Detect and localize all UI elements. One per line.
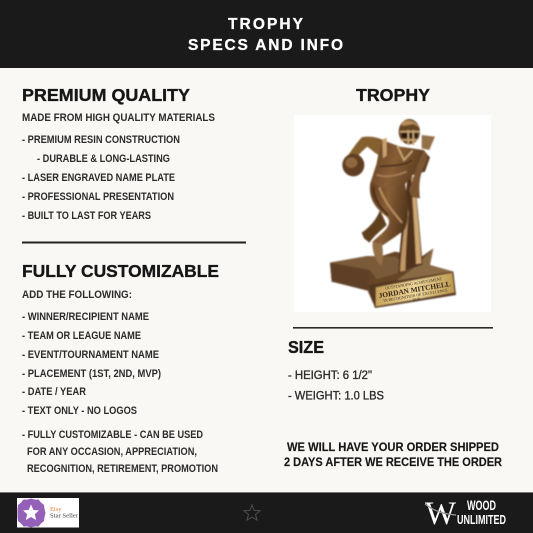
helmet [399, 119, 420, 144]
heading: premium quality: PREMIUM QUALITY [22, 85, 190, 105]
icon: center star [244, 505, 260, 520]
icon: etsy star seller badge: Star Seller [50, 512, 79, 520]
usage note [22, 429, 218, 475]
shoe [372, 242, 383, 266]
customization list: - WINNER/RECIPIENT NAME [22, 311, 149, 323]
feature list: materials: - PREMIUM RESIN CONSTRUCTION [22, 134, 180, 146]
back leg [362, 210, 387, 243]
engraved plate: JORDAN MITCHELL [378, 279, 451, 300]
feature list: materials: - LASER ENGRAVED NAME PLATE [22, 172, 175, 184]
panel: size [288, 337, 384, 402]
feature list: materials [22, 112, 215, 222]
shipping note: WE WILL HAVE YOUR ORDER SHIPPED [287, 440, 499, 454]
star column [398, 172, 423, 273]
usage note: - FULLY CUSTOMIZABLE - CAN BE USED [22, 429, 203, 441]
engraved plate: OUTSTANDING ACHIEVEMENT [385, 276, 443, 291]
header title: SPECS AND INFO [188, 37, 343, 54]
star wing tip [422, 135, 435, 150]
engraved plate [376, 273, 455, 308]
icon: etsy star seller badge [17, 498, 79, 528]
header band [0, 0, 533, 68]
customization list: - PLACEMENT (1ST, 2ND, MVP) [22, 368, 161, 380]
header title: TROPHY [228, 16, 304, 33]
icon: etsy star seller badge: Etsy [50, 506, 62, 513]
arm with football [348, 137, 382, 161]
logo: wood unlimited: UNLIMITED [457, 512, 506, 527]
footer band [0, 492, 533, 533]
heading: trophy: TROPHY [356, 85, 430, 105]
panel: fully customizable [22, 261, 219, 475]
customization list: ADD THE FOLLOWING: [22, 289, 132, 301]
customization list: - TEAM OR LEAGUE NAME [22, 330, 141, 342]
engraved plate: 2016 [412, 296, 421, 302]
logo: wood unlimited: W [425, 496, 457, 532]
feature list: materials: - BUILT TO LAST FOR YEARS [22, 210, 151, 222]
feature list: materials: - DURABLE & LONG-LASTING [37, 153, 170, 165]
customization list: - TEXT ONLY - NO LOGOS [22, 405, 137, 417]
size specs [288, 368, 384, 402]
torso [371, 139, 430, 188]
star base [330, 248, 453, 307]
usage note: FOR ANY OCCASION, APPRECIATION, [27, 446, 197, 458]
panel: premium quality [22, 85, 215, 222]
customization list [22, 289, 161, 417]
logo: wood unlimited: WOOD [467, 497, 496, 513]
size specs: - WEIGHT: 1.0 LBS [288, 388, 384, 402]
right arm [409, 150, 427, 198]
logo: wood unlimited [425, 496, 506, 532]
usage note: RECOGNITION, RETIREMENT, PROMOTION [27, 463, 218, 475]
heading: size: SIZE [288, 337, 324, 357]
front leg [370, 182, 408, 248]
product photo: football trophy [294, 115, 491, 312]
shipping note: 2 DAYS AFTER WE RECEIVE THE ORDER [284, 455, 502, 469]
customization list: - DATE / YEAR [22, 386, 86, 398]
feature list: materials: MADE FROM HIGH QUALITY MATERIALS [22, 112, 215, 124]
size specs: - HEIGHT: 6 1/2" [288, 368, 372, 382]
customization list: - EVENT/TOURNAMENT NAME [22, 349, 159, 361]
shipping note [284, 440, 502, 469]
header title [188, 16, 343, 54]
heading: fully customizable: FULLY CUSTOMIZABLE [22, 261, 219, 281]
feature list: materials: - PROFESSIONAL PRESENTATION [22, 191, 174, 203]
engraved plate: IN RECOGNITION OF EXCELLENCE [383, 287, 449, 303]
